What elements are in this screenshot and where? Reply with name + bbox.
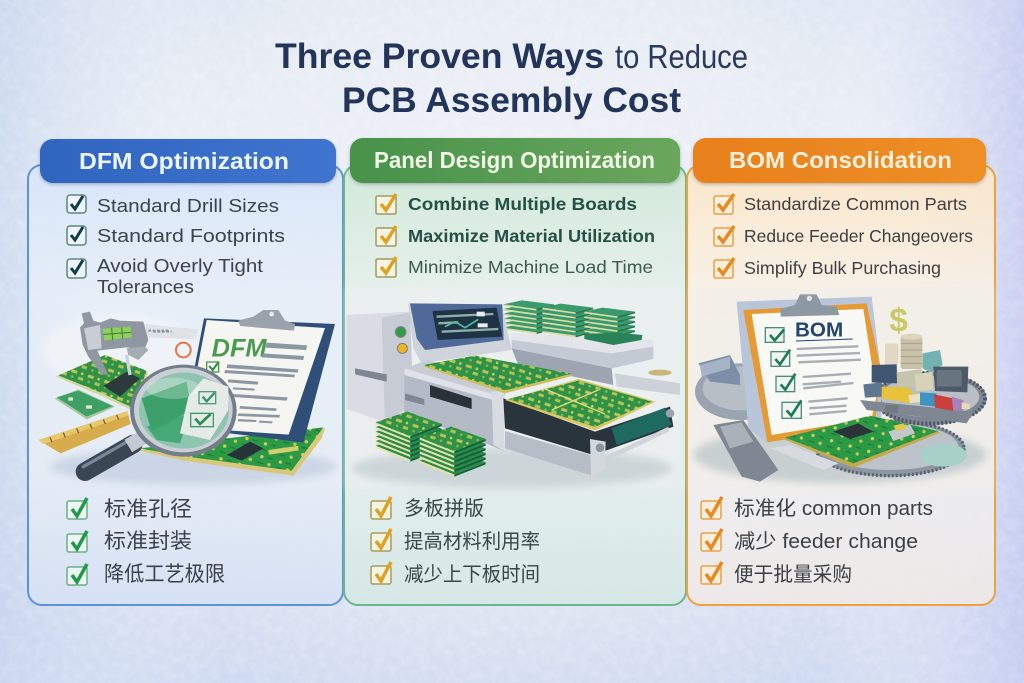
heading: DFM Optimization: DFM Optimization <box>79 148 289 174</box>
checklist: English BOM items: Standardize Common Parts <box>744 194 967 214</box>
clipboard with BOM checklist <box>737 294 882 442</box>
heading: BOM Consolidation: BOM Consolidation <box>729 147 952 173</box>
ruler <box>38 411 131 453</box>
checklist: Chinese panel items: 减少上下板时间 <box>404 563 540 586</box>
checklist: English panel items: Maximize Material Utilization <box>408 226 655 246</box>
checklist: Chinese BOM items: 便于批量采购 <box>734 563 852 586</box>
PCB panel on machine bed <box>423 356 573 393</box>
clipboard with DFM checklist: DFM <box>212 335 267 363</box>
checklist: Chinese BOM items: 减少 feeder change <box>734 530 918 553</box>
checklist: English BOM items: Reduce Feeder Changeovers <box>744 226 973 246</box>
title: PCB Assembly Cost <box>342 81 681 120</box>
PCB with chip <box>783 416 941 468</box>
checklist: Chinese BOM items <box>701 497 933 586</box>
electronic components <box>860 350 973 423</box>
checklist: English DFM items: Standard Footprints <box>97 225 285 246</box>
checklist: English DFM items: Tolerances <box>97 276 194 297</box>
gear disc background <box>695 355 987 482</box>
heading: DFM Optimization <box>40 139 336 183</box>
clipboard with DFM checklist <box>188 310 335 443</box>
heading: Panel Design Optimization <box>350 138 680 183</box>
checklist: English panel items <box>376 194 655 277</box>
PCB under clipboard <box>137 427 325 476</box>
rear table with board stacks <box>503 300 680 395</box>
icon: orange circle marker <box>176 343 191 357</box>
clipboard with BOM checklist: BOM <box>795 319 843 342</box>
illustration: panel assembly machine with board stacks <box>347 288 680 488</box>
panel: DFM Optimization <box>28 139 343 605</box>
checklist: English DFM items: Avoid Overly Tight <box>97 255 263 276</box>
checklist: English panel items: Combine Multiple Boards <box>408 194 637 214</box>
magnifying glass <box>83 365 237 472</box>
caliper <box>80 312 198 375</box>
coins <box>885 334 922 369</box>
checklist: English BOM items <box>714 194 973 278</box>
checklist: Chinese panel items: 提高材料利用率 <box>404 530 540 553</box>
checklist: English panel items: Minimize Machine Load Time <box>408 257 653 277</box>
conveyor belt <box>503 398 674 476</box>
checklist: Chinese panel items: 多板拼版 <box>404 497 484 520</box>
checklist: Chinese panel items <box>371 497 540 586</box>
icon: dollar sign: $ <box>889 303 908 340</box>
checklist: Chinese DFM items: 标准孔径 <box>104 498 192 521</box>
board stacks front <box>376 412 486 477</box>
heading: BOM Consolidation <box>693 138 986 183</box>
heading: Panel Design Optimization: Panel Design Optimization <box>374 147 655 173</box>
illustration: BOM clipboard, parts and gears <box>692 287 992 490</box>
checklist: Chinese DFM items <box>67 498 225 586</box>
checklist: English BOM items: Simplify Bulk Purchasing <box>744 258 941 278</box>
illustration: DFM clipboard, caliper, magnifier and boards <box>38 310 337 485</box>
panel: Panel Design Optimization <box>344 138 686 605</box>
checklist: English DFM items: Standard Drill Sizes <box>97 195 279 216</box>
title <box>275 37 748 120</box>
panel: BOM Consolidation <box>687 138 995 605</box>
left machine housing with status lights <box>347 312 413 422</box>
PCB panel on conveyor <box>505 379 656 430</box>
machine base <box>404 360 512 451</box>
title: to Reduce <box>615 38 748 75</box>
title: Three Proven Ways <box>275 37 604 76</box>
machine monitor <box>408 303 512 363</box>
checklist: Chinese DFM items: 降低工艺极限 <box>104 563 225 586</box>
checklist: Chinese BOM items: 标准化 common parts <box>734 497 933 520</box>
PCB boards left <box>55 355 148 419</box>
checklist: English DFM items <box>67 195 285 297</box>
checklist: Chinese DFM items: 标准封装 <box>104 530 192 553</box>
